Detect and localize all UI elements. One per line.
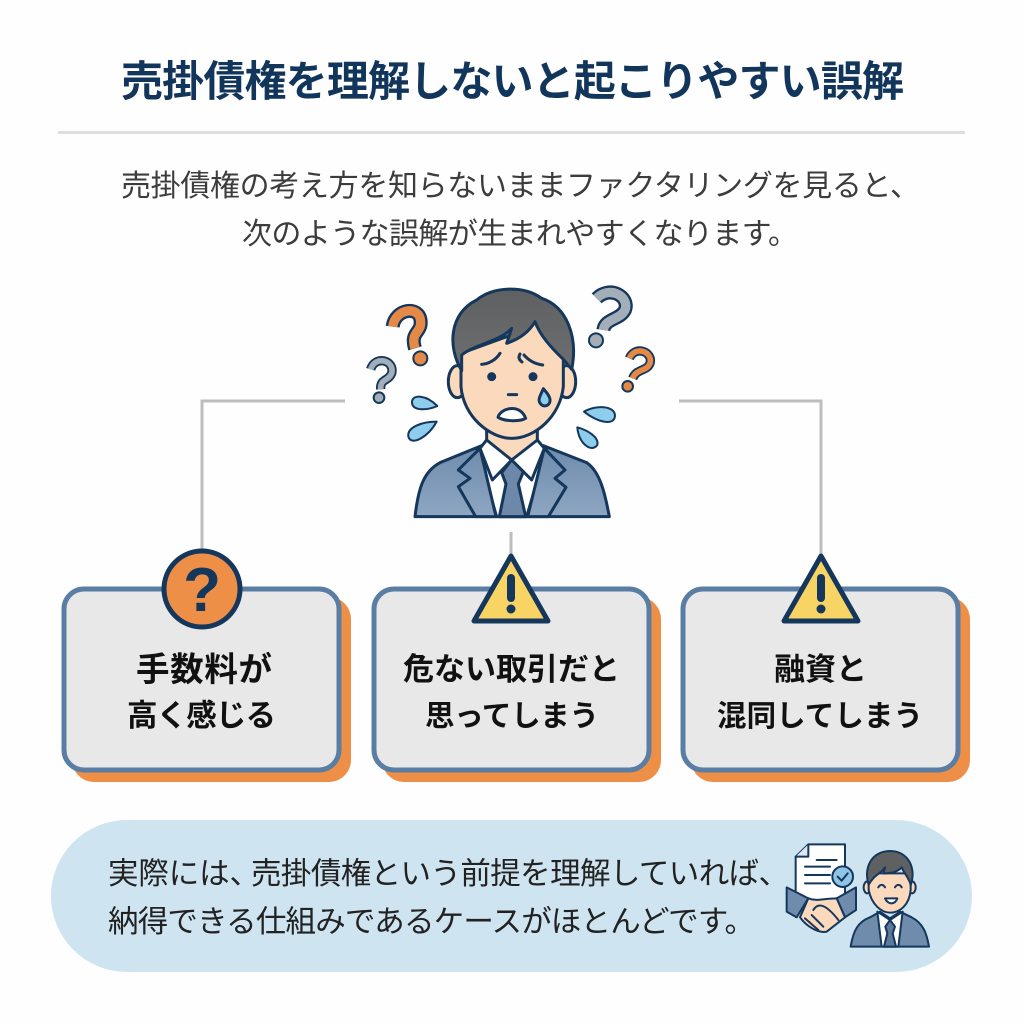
panel: misconception 2 bbox=[374, 589, 661, 782]
card 2 text: 思ってしまう bbox=[425, 700, 599, 733]
conclusion text: 実際には、 bbox=[108, 857, 260, 891]
icon: warning triangle 3 bbox=[784, 556, 858, 621]
card 1 text: 高く感じる bbox=[127, 699, 276, 733]
card 1 text: 手数料が bbox=[136, 651, 272, 689]
ears bbox=[448, 366, 576, 398]
card 1 text bbox=[127, 651, 276, 733]
intro text bbox=[121, 170, 920, 251]
icon: confused businessman with question marks and sweat bbox=[371, 289, 650, 517]
panel: conclusion callout bbox=[51, 820, 972, 972]
card 3 text: 融資と bbox=[774, 652, 867, 687]
intro text: 売掛債権の考え方を知らないままファクタリングを見ると、 bbox=[121, 170, 920, 203]
smiling businessman bbox=[851, 851, 929, 947]
card 2 text: 危ない取引だと bbox=[403, 652, 620, 687]
shirt and neck bbox=[458, 427, 566, 517]
sweat drops bbox=[408, 397, 615, 448]
question marks bbox=[371, 292, 650, 403]
conclusion text: 納得できる仕組みであるケースがほとんどです。 bbox=[108, 905, 755, 939]
intro text: 次のような誤解が生まれやすくなります。 bbox=[242, 218, 798, 251]
suit body bbox=[415, 446, 609, 517]
card 2 text bbox=[403, 652, 620, 733]
face bbox=[461, 320, 563, 438]
icon: question badge: ? bbox=[183, 556, 221, 625]
panel: misconception 3 bbox=[683, 589, 970, 782]
icon: document, handshake and smiling businessman bbox=[787, 844, 929, 947]
conclusion text bbox=[108, 857, 789, 939]
icon: question badge bbox=[164, 551, 240, 627]
title: 売掛債権を理解しないと起こりやすい誤解 bbox=[121, 58, 904, 105]
handshake bbox=[787, 887, 856, 932]
icon: warning triangle 2 bbox=[474, 556, 548, 621]
conclusion text: 売掛債権という前提を理解していれば、 bbox=[251, 857, 789, 891]
document bbox=[796, 844, 853, 900]
card 3 text: 混同してしまう bbox=[717, 700, 923, 733]
hair bbox=[453, 289, 574, 371]
card 3 text bbox=[717, 652, 923, 733]
facial features bbox=[482, 353, 550, 421]
panel: misconception 1 bbox=[64, 589, 351, 782]
connector lines bbox=[202, 401, 821, 556]
